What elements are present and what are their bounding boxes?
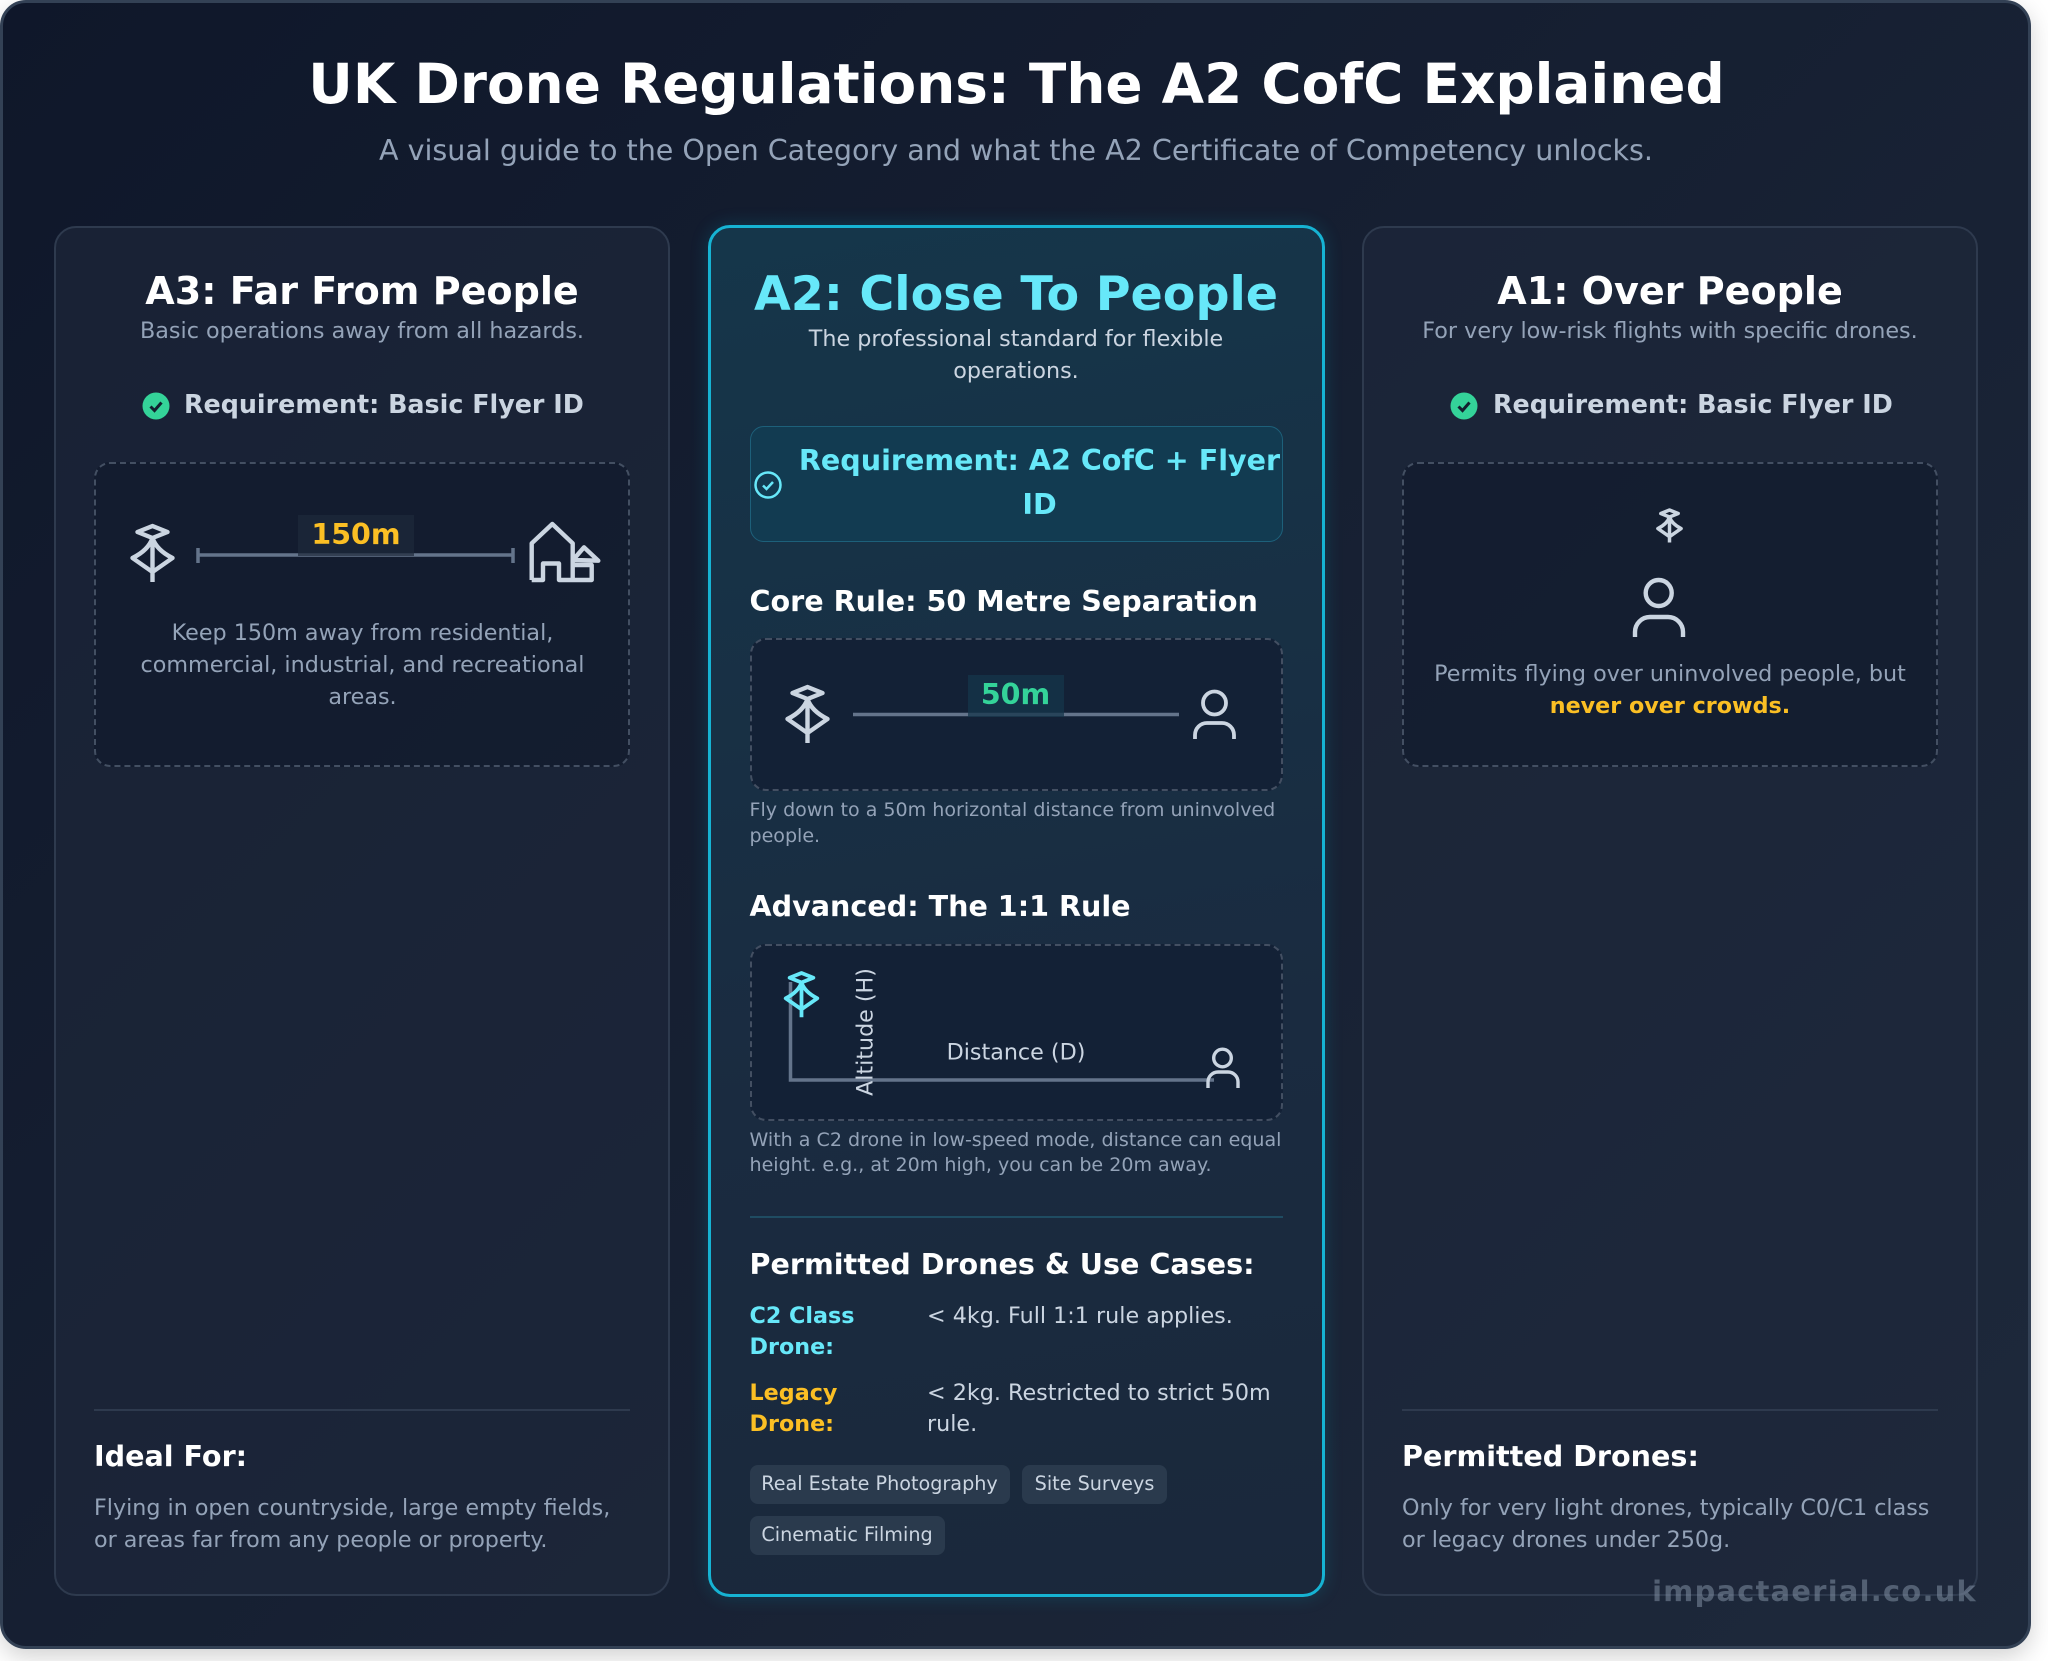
- icon: person: [1195, 692, 1234, 739]
- watermark: impactaerial.co.uk: [1652, 1574, 1977, 1608]
- 1:1 note: With a C2 drone in low-speed mode, distance can equal: [750, 1128, 1281, 1150]
- ideal for text: Flying in open countryside, large empty fields,: [94, 1495, 610, 1521]
- C2 detail: < 4kg. Full 1:1 rule applies.: [927, 1302, 1233, 1328]
- A3 rule text: commercial, industrial, and recreational: [141, 652, 584, 678]
- 150m label: 150m: [311, 518, 401, 550]
- A3 diagram box: [94, 462, 630, 767]
- 1:1 rule diagram: [784, 968, 1240, 1096]
- permitted heading: Permitted Drones & Use Cases:: [750, 1247, 1255, 1281]
- panel: A3: [54, 226, 670, 1596]
- A3 description: Basic operations away from all hazards.: [140, 318, 584, 344]
- distance line: [853, 713, 1179, 716]
- A2 description: The professional standard for flexible: [809, 326, 1223, 352]
- A1 description: For very low-risk flights with specific drones.: [1422, 318, 1918, 344]
- A1 rule text: never over crowds.: [1550, 693, 1790, 719]
- 50m label: 50m: [981, 678, 1050, 711]
- A2 requirement box: [750, 426, 1282, 542]
- tag: site surveys: [1022, 1465, 1167, 1504]
- permitted heading: Permitted Drones:: [1402, 1438, 1699, 1472]
- 150m distance diagram: [130, 522, 600, 582]
- subtitle: A visual guide to the Open Category and what the A2 Certificate of Competency unlocks.: [379, 133, 1653, 167]
- A2 requirement text: [799, 443, 1280, 521]
- panel: A1: [1362, 226, 1978, 1596]
- A3 ideal for: [94, 1409, 630, 1553]
- A1 permitted drones: [1402, 1409, 1938, 1553]
- icon: A1 check: [1450, 392, 1478, 420]
- ideal for text: [94, 1495, 610, 1553]
- 150m label: [298, 514, 414, 556]
- icon: small drone: [1658, 510, 1681, 542]
- core rule heading: Core Rule: 50 Metre Separation: [750, 584, 1258, 618]
- altitude label: Altitude (H): [852, 968, 878, 1096]
- icon: buildings: [532, 524, 598, 580]
- icon: cyan drone: [786, 973, 817, 1017]
- distance line: [198, 548, 513, 563]
- icon: A2 check: [754, 471, 782, 499]
- legacy detail: < 2kg. Restricted to strict 50m: [927, 1380, 1271, 1406]
- A2 heading: A2: Close To People: [754, 266, 1278, 322]
- ideal for heading: Ideal For:: [94, 1438, 247, 1472]
- panel: A2: [708, 225, 1325, 1597]
- A2 requirement text: Requirement: A2 CofC + Flyer: [799, 443, 1280, 477]
- advanced heading: Advanced: The 1:1 Rule: [750, 888, 1131, 922]
- 50m note: [750, 799, 1275, 847]
- A2 description: [808, 326, 1223, 384]
- legacy label: Legacy: [750, 1380, 837, 1406]
- tag: cinematic: [750, 1516, 944, 1555]
- A3 requirement: Requirement: Basic Flyer ID: [184, 389, 584, 419]
- A1 requirement: Requirement: Basic Flyer ID: [1493, 389, 1893, 419]
- permitted text: [1402, 1495, 1929, 1553]
- ideal for text: or areas far from any people or property.: [94, 1527, 547, 1553]
- 1:1 note: height. e.g., at 20m high, you can be 20m away.: [750, 1154, 1212, 1176]
- A1 rule text: [1434, 661, 1906, 719]
- A1 diagram box: [1402, 462, 1938, 767]
- C2 label: Drone:: [750, 1334, 834, 1360]
- 50m note: people.: [750, 825, 820, 847]
- distance label: Distance (D): [947, 1040, 1085, 1066]
- icon: drone: [132, 526, 172, 582]
- A1 heading: A1: Over People: [1497, 268, 1843, 312]
- C2 label: C2 Class: [750, 1302, 855, 1328]
- A1 rule text: Permits flying over uninvolved people, but: [1434, 661, 1906, 687]
- 50m label: [968, 675, 1064, 717]
- legacy label: Drone:: [750, 1411, 834, 1437]
- tag: real estate: Real Estate Photography: [761, 1472, 998, 1495]
- 1:1 note: [750, 1128, 1281, 1176]
- icon: small person: [1208, 1049, 1238, 1088]
- overflight diagram: [1632, 508, 1686, 637]
- A3 rule text: areas.: [328, 684, 397, 710]
- 1:1 diagram box: [750, 944, 1282, 1121]
- 50m distance diagram: [785, 684, 1236, 743]
- tag: cinematic: Cinematic Filming: [761, 1523, 933, 1546]
- tag: site surveys: Site Surveys: [1035, 1472, 1154, 1495]
- A3 heading: A3: Far From People: [145, 268, 579, 312]
- A2 requirement text: ID: [1022, 487, 1057, 521]
- A3 rule text: Keep 150m away from residential,: [172, 620, 553, 646]
- title: UK Drone Regulations: The A2 CofC Explained: [308, 52, 1725, 116]
- legacy label: [750, 1380, 837, 1437]
- tag: real estate: [750, 1465, 1010, 1504]
- icon: A3 check: [142, 392, 170, 420]
- 50m note: Fly down to a 50m horizontal distance from uninvolved: [750, 799, 1275, 821]
- icon: person: [1635, 580, 1683, 637]
- icon: drone: [788, 687, 828, 743]
- C2 label: [750, 1302, 855, 1360]
- permitted text: Only for very light drones, typically C0/C1 class: [1402, 1495, 1929, 1521]
- 50m diagram box: [750, 638, 1282, 791]
- divider: [750, 1216, 1282, 1218]
- legacy detail: rule.: [927, 1411, 977, 1437]
- permitted text: or legacy drones under 250g.: [1402, 1527, 1730, 1553]
- A3 rule text: [141, 620, 584, 710]
- legacy detail: [927, 1380, 1271, 1437]
- A2 description: operations.: [953, 358, 1079, 384]
- axes: [790, 982, 1214, 1080]
